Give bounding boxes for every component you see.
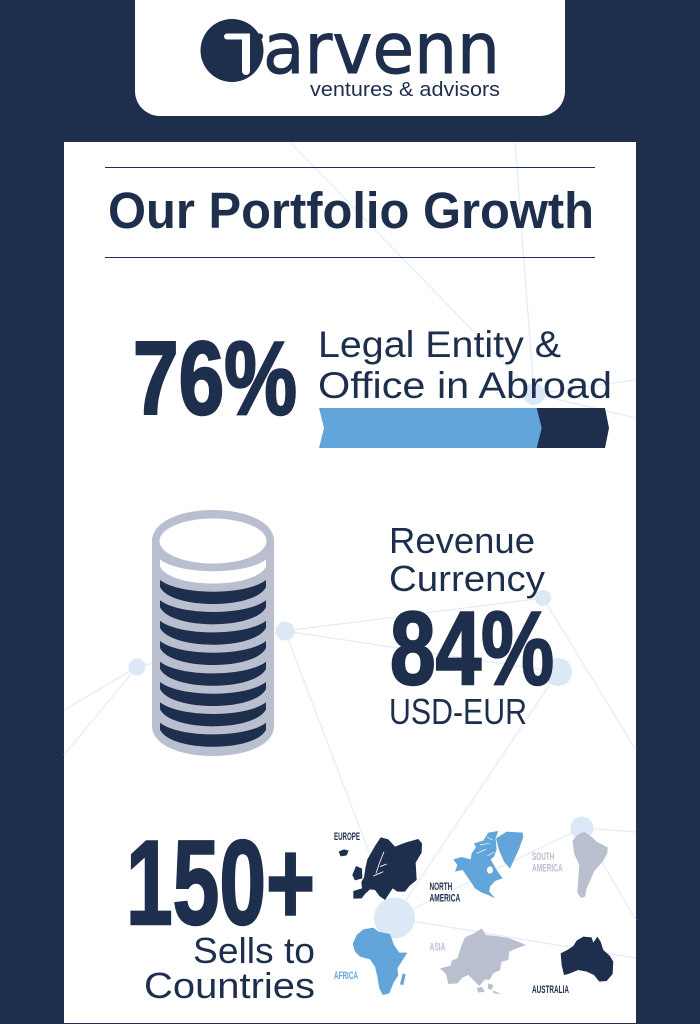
stat: revenue currency 84% — [389, 520, 554, 732]
icon: coin stack — [152, 510, 274, 756]
label north america — [430, 881, 460, 904]
label south america — [532, 851, 563, 874]
label countries: Countries — [144, 965, 315, 1006]
label usd-eur: USD-EUR — [389, 691, 527, 732]
europe — [339, 837, 422, 900]
logo tagline: ventures & advisors — [310, 79, 500, 101]
label europe: EUROPE — [334, 831, 360, 843]
label australia: AUSTRALIA — [532, 984, 569, 996]
label south america: AMERICA — [532, 862, 563, 874]
stat: legal entity 76% — [133, 321, 612, 448]
label asia: ASIA — [430, 942, 446, 954]
network background pattern — [64, 142, 636, 958]
label africa: AFRICA — [334, 970, 358, 982]
south america — [573, 832, 608, 898]
logo mark: circle with T — [200, 19, 264, 82]
asia — [440, 928, 526, 994]
number 76%: 76% — [133, 321, 297, 437]
number 150+: 150+ — [126, 816, 315, 950]
title block — [105, 168, 595, 258]
progress bar blue 76% — [319, 408, 542, 448]
title: Our Portfolio Growth — [108, 182, 594, 239]
network nodes — [128, 383, 594, 938]
north america — [453, 831, 523, 898]
world map continents — [334, 831, 613, 996]
progress bar navy remainder — [530, 408, 609, 448]
header panel with logo — [135, 0, 565, 116]
main white card — [64, 142, 636, 1023]
label legal entity line 1: Legal Entity & — [318, 324, 561, 365]
label north america: AMERICA — [430, 892, 460, 904]
label revenue: Revenue — [389, 520, 535, 561]
label legal entity line 2: Office in Abroad — [318, 365, 612, 406]
logo wordmark: arvenn — [263, 8, 500, 90]
label south america: SOUTH — [532, 851, 554, 863]
africa — [353, 928, 407, 995]
label currency: Currency — [389, 558, 545, 599]
label north america: NORTH — [430, 881, 452, 893]
australia — [561, 937, 613, 982]
number 84%: 84% — [390, 591, 554, 707]
stat: 150+ countries — [126, 816, 315, 1006]
label sells to: Sells to — [193, 930, 315, 971]
